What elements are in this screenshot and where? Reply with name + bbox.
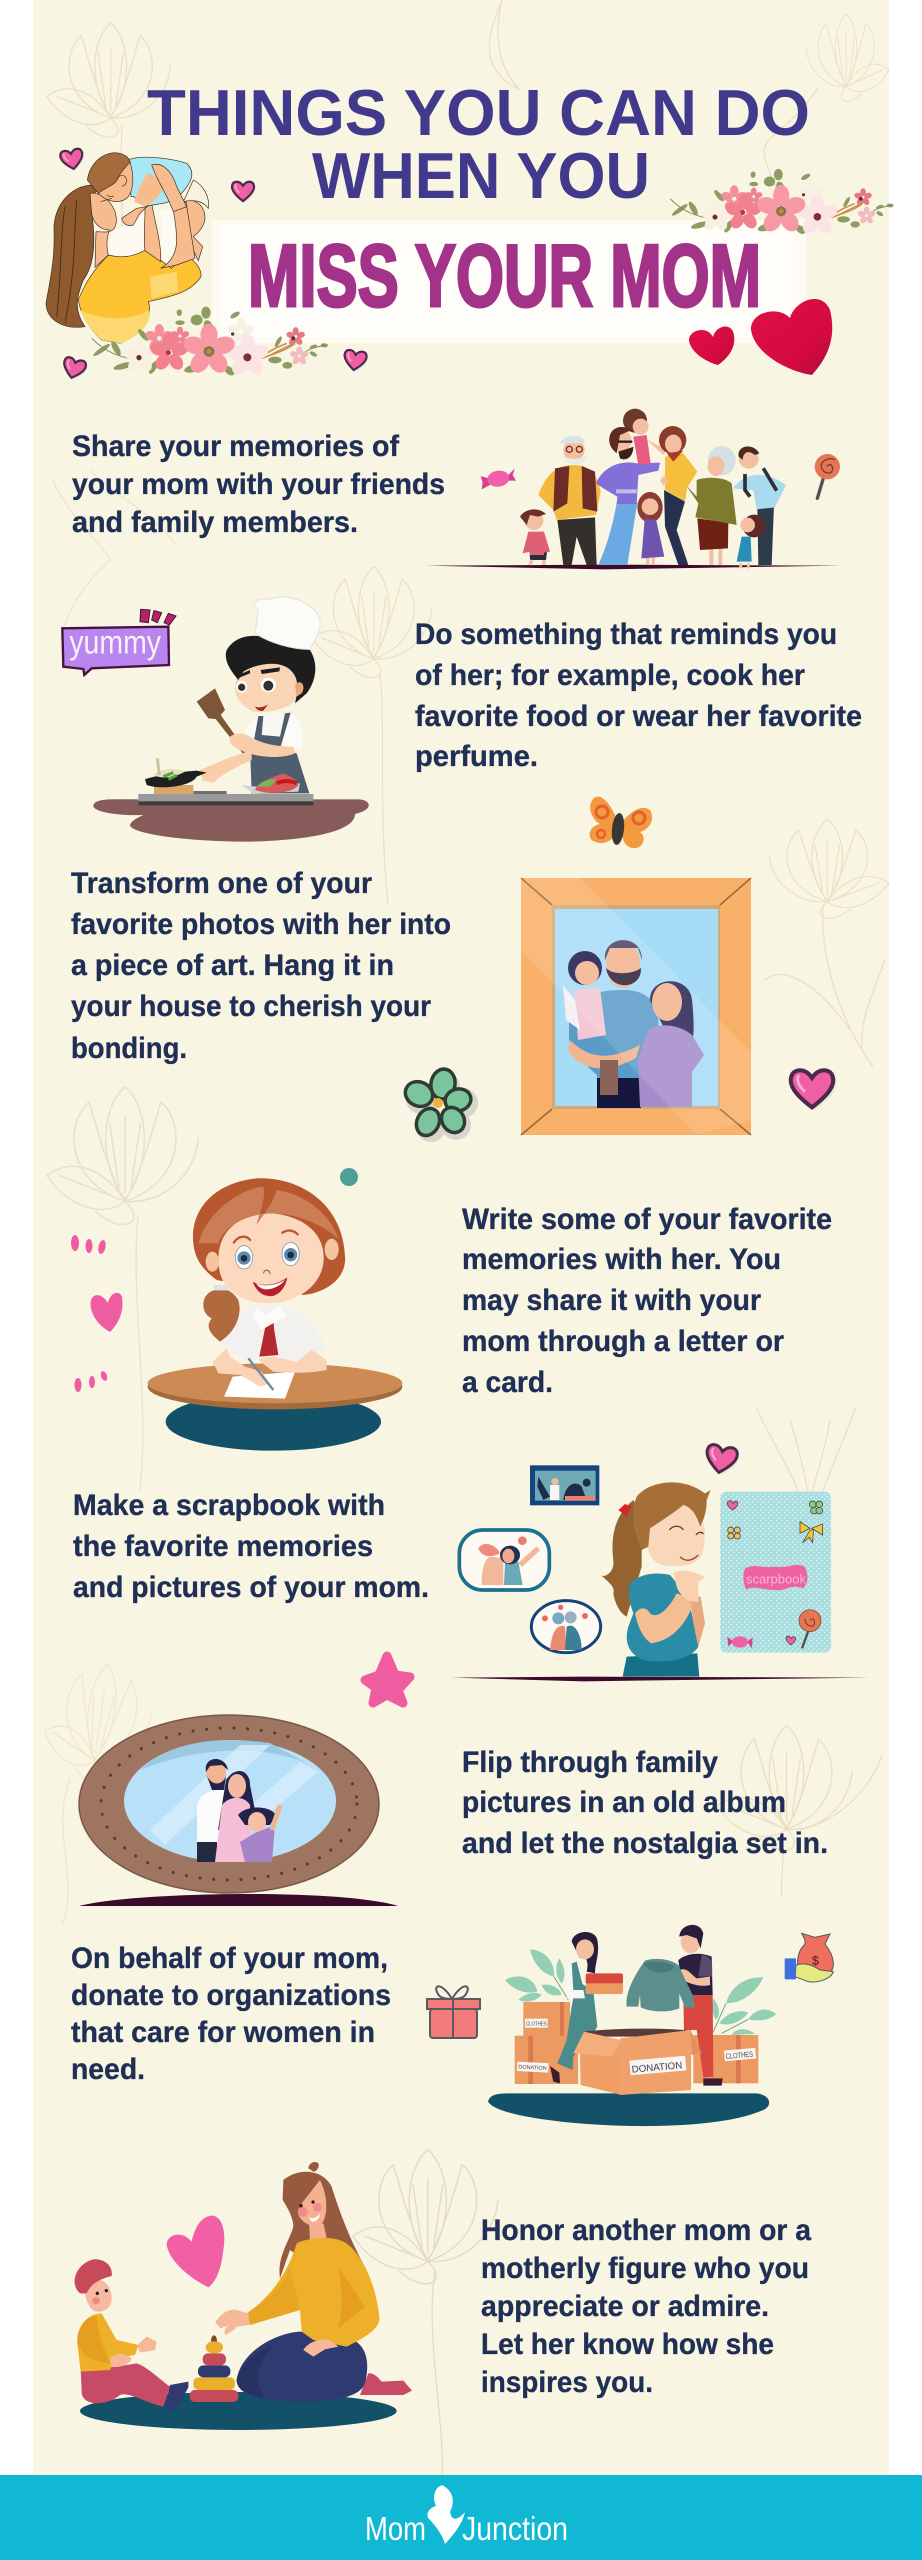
text: scrapbook	[73, 1489, 429, 1604]
text: something that reminds you: perfume.	[415, 740, 538, 773]
text: flip through album: Flip through family	[462, 1746, 718, 1779]
text: write memories: Write some of your favorite	[462, 1203, 832, 1236]
picture frame with family	[521, 878, 751, 1135]
text: flip through album	[462, 1746, 828, 1860]
oval photo	[531, 1601, 601, 1653]
figure: father with daughter on shoulders	[596, 409, 660, 565]
yummy speech bubble: yummy	[69, 624, 161, 661]
text: write memories: may share it with your	[462, 1284, 761, 1317]
yummy speech bubble	[62, 609, 176, 675]
title: WHEN YOU	[312, 139, 650, 212]
title banner: miss your mom	[212, 220, 806, 343]
icon: butterfly	[590, 797, 652, 848]
illustration: mother lifting baby	[46, 153, 209, 343]
text: donate	[71, 1942, 391, 2086]
text: honor another mom: motherly figure who you	[481, 2252, 809, 2285]
illustration: boy chef cooking	[62, 597, 369, 842]
text: write memories: a card.	[462, 1366, 553, 1399]
logo: MomJunction: Junction	[462, 2510, 568, 2547]
text: donate: On behalf of your mom,	[71, 1942, 388, 1975]
stacking toy	[190, 2335, 238, 2402]
mother	[638, 981, 704, 1107]
text: honor another mom: appreciate or admire.	[481, 2290, 769, 2323]
illustration: donation boxes	[488, 1925, 833, 2126]
text: share memories: and family members.	[72, 506, 358, 539]
mother	[215, 1771, 256, 1862]
icon: money bag in hand: $	[812, 1954, 819, 1968]
donation box: DONATION	[631, 2060, 683, 2076]
text: scrapbook: and pictures of your mom.	[73, 1571, 429, 1604]
text: transform a photo: favorite photos with her into	[71, 908, 451, 941]
donation box	[573, 2029, 702, 2095]
title	[147, 76, 810, 212]
text: flip through album: and let the nostalgia set in.	[462, 1827, 828, 1860]
illustration: mother and child with stacking toy	[75, 2162, 412, 2430]
figure: grandmother	[686, 446, 737, 565]
father	[197, 1759, 228, 1862]
illustration: girl writing at table	[148, 1178, 402, 1451]
rectangle photo	[530, 1465, 599, 1505]
pink accent marks left of girl	[71, 1235, 122, 1392]
figure: grandfather	[538, 436, 601, 565]
scrapbook	[720, 1492, 831, 1653]
child	[75, 2259, 188, 2413]
text: write memories	[462, 1203, 832, 1399]
sticker heart	[703, 1444, 741, 1478]
text: transform a photo: Transform one of your	[71, 867, 372, 900]
illustration: extended family	[425, 409, 842, 569]
text: scrapbook: the favorite memories	[73, 1530, 373, 1563]
scrapbook: scarpbook	[746, 1572, 807, 1586]
text: write memories: memories with her. You	[462, 1243, 781, 1276]
small boxes	[515, 2002, 758, 2084]
text: share memories: your mom with your friends	[72, 468, 445, 501]
text: flip through album: pictures in an old album	[462, 1786, 786, 1819]
woman	[550, 1932, 623, 2083]
girl	[601, 1482, 711, 1677]
text: honor another mom: Let her know how she	[481, 2328, 774, 2361]
mother	[215, 2162, 412, 2402]
text: something that reminds you: Do something that reminds you	[415, 618, 837, 651]
ground line	[452, 1677, 870, 1681]
illustration: oval mirror frame with family	[79, 1715, 398, 1906]
text: honor another mom	[481, 2214, 811, 2399]
text: something that reminds you: of her; for example, cook her	[415, 659, 805, 692]
text: something that reminds you: favorite food or wear her favorite	[415, 700, 862, 733]
logo: MomJunction: Mom	[365, 2510, 426, 2547]
text: donate: that care for women in	[71, 2016, 375, 2049]
text: honor another mom: inspires you.	[481, 2366, 653, 2399]
icon: candy	[481, 468, 516, 489]
icon: money bag in hand	[785, 1933, 833, 1982]
figure: small girl	[737, 515, 765, 568]
text: share memories: Share your memories of	[72, 430, 400, 463]
icon: gift box	[427, 1986, 480, 2038]
small boxes: DONATION	[518, 2064, 547, 2072]
daughter	[238, 1805, 280, 1862]
logo: MomJunction	[365, 2485, 568, 2547]
illustration: girl with scrapbook and photos	[452, 1465, 870, 1681]
floral spray: bottom left	[92, 307, 328, 378]
red hearts	[689, 299, 832, 375]
text: scrapbook: Make a scrapbook with	[73, 1489, 385, 1522]
title: THINGS YOU CAN DO	[147, 76, 810, 149]
plants	[505, 1949, 776, 2035]
small boxes: CLOTHES	[725, 2050, 753, 2061]
text: transform a photo	[71, 867, 451, 1065]
figure: boy	[520, 509, 550, 565]
daughter	[563, 951, 640, 1095]
father	[569, 940, 660, 1108]
small boxes: CLOTHES	[526, 2021, 547, 2027]
sticker heart	[791, 1070, 836, 1111]
icon: pink heart	[167, 2216, 224, 2287]
text: transform a photo: bonding.	[71, 1032, 187, 1065]
figure: mother	[647, 426, 697, 565]
sticker hearts around hero	[59, 148, 369, 383]
text: something that reminds you	[415, 618, 862, 773]
text: share memories	[72, 430, 445, 539]
text: transform a photo: your house to cherish your	[71, 990, 431, 1023]
text: write memories: mom through a letter or	[462, 1325, 784, 1358]
figure: young father	[733, 446, 786, 565]
text: donate: donate to organizations	[71, 1979, 391, 2012]
text: donate: need.	[71, 2053, 145, 2086]
teal dot	[340, 1168, 358, 1186]
text: transform a photo: a piece of art. Hang it in	[71, 949, 394, 982]
base ellipse	[488, 2093, 769, 2126]
icon: pink star	[365, 1656, 410, 1703]
ground line	[425, 565, 842, 569]
icon: lollipop	[815, 454, 840, 498]
mirror shadow	[79, 1894, 398, 1906]
icon: green flower sticker	[401, 1067, 478, 1142]
man	[678, 1925, 723, 2086]
figure: girl in purple	[637, 492, 664, 565]
floral spray: top right	[670, 169, 894, 236]
text: honor another mom: Honor another mom or a	[481, 2214, 811, 2247]
rounded photo	[459, 1530, 549, 1590]
footer bar	[0, 2475, 922, 2560]
sweater	[626, 1959, 695, 2011]
